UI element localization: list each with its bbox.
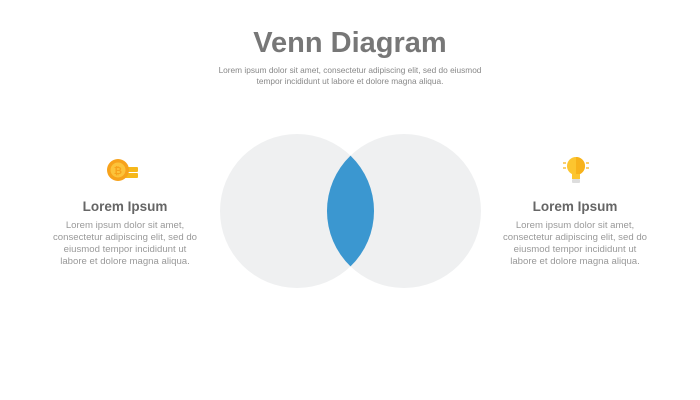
panel right text: labore et dolore magna aliqua. [510,256,640,267]
panel left text: consectetur adipiscing elit, sed do [53,232,197,243]
panel right text: Lorem ipsum dolor sit amet, [516,220,634,231]
panel left heading: Lorem Ipsum [83,199,167,214]
subtitle [219,65,481,86]
panel right heading: Lorem Ipsum [533,199,617,214]
circle right [327,134,481,288]
intersection lens [327,156,374,266]
panel left text: labore et dolore magna aliqua. [60,256,190,267]
icon: coins: ₿ [114,165,122,177]
panel left text: Lorem ipsum dolor sit amet, [66,220,184,231]
panel right text: eiusmod tempor incididunt ut [514,244,636,255]
icon: lightbulb [563,157,589,183]
circle left [220,134,374,288]
panel right text: consectetur adipiscing elit, sed do [503,232,647,243]
title: Venn Diagram [253,27,447,59]
icon: coins [107,159,138,181]
panel right text [503,220,647,267]
subtitle: tempor incididunt ut labore et dolore magna aliqua. [257,76,443,86]
subtitle: Lorem ipsum dolor sit amet, consectetur adipiscing elit, sed do eiusmod [219,65,481,75]
panel left text: eiusmod tempor incididunt ut [64,244,186,255]
panel left text [53,220,197,267]
